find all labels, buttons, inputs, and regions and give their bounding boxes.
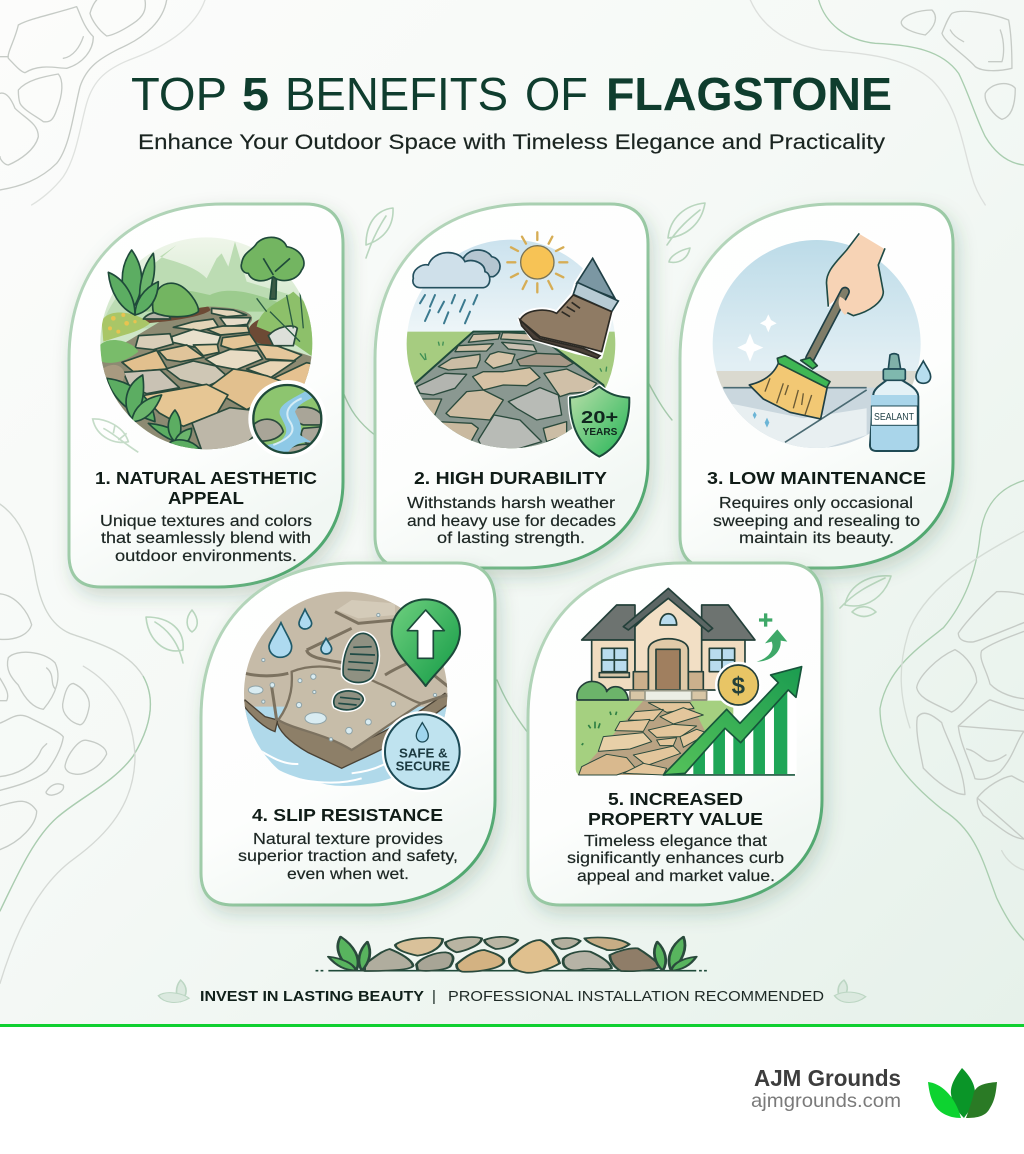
description: of lasting strength. [437,530,585,547]
card 5 shape [528,563,822,905]
brand url: ajmgrounds.com [751,1090,901,1112]
description [100,513,312,565]
footer text [200,988,824,1005]
icon: dollar coin: $ [732,673,745,700]
footer leaf right [834,980,866,1003]
icon: stream inset [248,380,326,458]
heading: 3. LOW MAINTENANCE [707,468,926,488]
card 1 shape [69,204,343,587]
description: Withstands harsh weather [407,495,616,512]
decorative leaves [146,203,891,663]
footer stones illustration [316,937,709,973]
footer text: PROFESSIONAL INSTALLATION RECOMMENDED [448,989,824,1005]
icon: footprint [334,633,378,710]
description: Timeless elegance that [584,833,768,850]
description: outdoor environments. [115,548,297,565]
card 4 shape [201,563,495,905]
illustration: broom and sealant [710,233,931,455]
title [131,68,892,120]
icon: safe and secure badge [382,711,463,792]
icon: sun [507,232,567,292]
bottom white band [0,1027,1024,1154]
heading: 5. INCREASED [608,789,743,809]
lawn and stone path [576,701,733,775]
card 2 shape [375,204,648,568]
card 3 shape [680,204,953,568]
icon: plus and up arrow [757,613,787,662]
icon: dollar coin [715,662,762,708]
icon: 20+ years shield: 20+ [581,407,618,427]
decorative stones top right [750,0,1024,205]
icon: sealant bottle [870,354,931,451]
description: even when wet. [287,866,409,883]
panel: card 3 low maintenance [680,204,953,568]
decorative stones top left [0,0,205,205]
description [238,831,458,883]
brand name: AJM Grounds [754,1065,901,1091]
footer text: | [432,988,436,1005]
icon: water drops [269,609,332,657]
green divider [0,1024,1024,1027]
icon: grass tuft left [328,937,370,971]
panel: card 2 high durability [375,204,648,568]
subtitle: Enhance Your Outdoor Space with Timeless Elegance and Practicality [138,130,885,154]
title: BENEFITS [285,68,508,120]
logo: green leaves [928,1068,997,1118]
title: FLAGSTONE [606,68,892,120]
panel: card 1 natural aesthetic appeal [69,204,343,587]
footer leaf left [158,980,189,1002]
description: significantly enhances curb [567,850,784,867]
illustration: weather and boot on stone [403,232,629,457]
heading line 2: APPEAL [168,488,244,508]
decorative connecting lines between cards [343,382,672,733]
illustration: flagstone garden path [100,237,326,458]
heading: 4. SLIP RESISTANCE [252,805,443,825]
icon: safe and secure badge: SAFE & [399,746,448,760]
description: that seamlessly blend with [101,530,311,547]
icon: boot [520,258,618,358]
icon: safe and secure badge: SECURE [396,760,450,774]
heading: 2. HIGH DURABILITY [414,468,607,488]
icon: leaf outline [93,419,138,452]
description [407,495,616,547]
icon: cloud and rain [413,250,500,323]
description: sweeping and resealing to [713,513,920,530]
description: Natural texture provides [253,831,443,848]
description [713,495,920,547]
icon: hand [826,233,885,316]
icon: house [577,588,755,701]
description [567,833,784,885]
panel: card 5 increased property value [528,563,822,905]
icon: grass tuft right [654,937,696,971]
icon: sealant bottle: SEALANT [874,412,914,423]
illustration: wet stone with footprint [242,590,463,792]
icon: 20+ years shield: YEARS [583,427,618,438]
description: appeal and market value. [577,868,775,885]
description: and heavy use for decades [407,513,616,530]
panel: card 4 slip resistance [201,563,495,905]
title: 5 [242,68,269,120]
decorative stones left [0,504,150,983]
icon: growth chart [663,667,802,775]
icon: broom [749,233,885,419]
heading: 1. NATURAL AESTHETIC [95,468,317,488]
description: Unique textures and colors [100,513,312,530]
illustration: house and value chart [576,588,802,775]
title: OF [525,68,588,120]
description: maintain its beauty. [739,530,894,547]
description: superior traction and safety, [238,848,458,865]
decorative stones right [880,481,1024,940]
icon: 20+ years shield [570,387,629,457]
description: Requires only occasional [719,495,913,512]
icon: green location arrow pin [392,599,460,686]
footer text: INVEST IN LASTING BEAUTY [200,989,424,1005]
title: TOP [131,68,227,120]
heading line 2: PROPERTY VALUE [588,809,763,829]
